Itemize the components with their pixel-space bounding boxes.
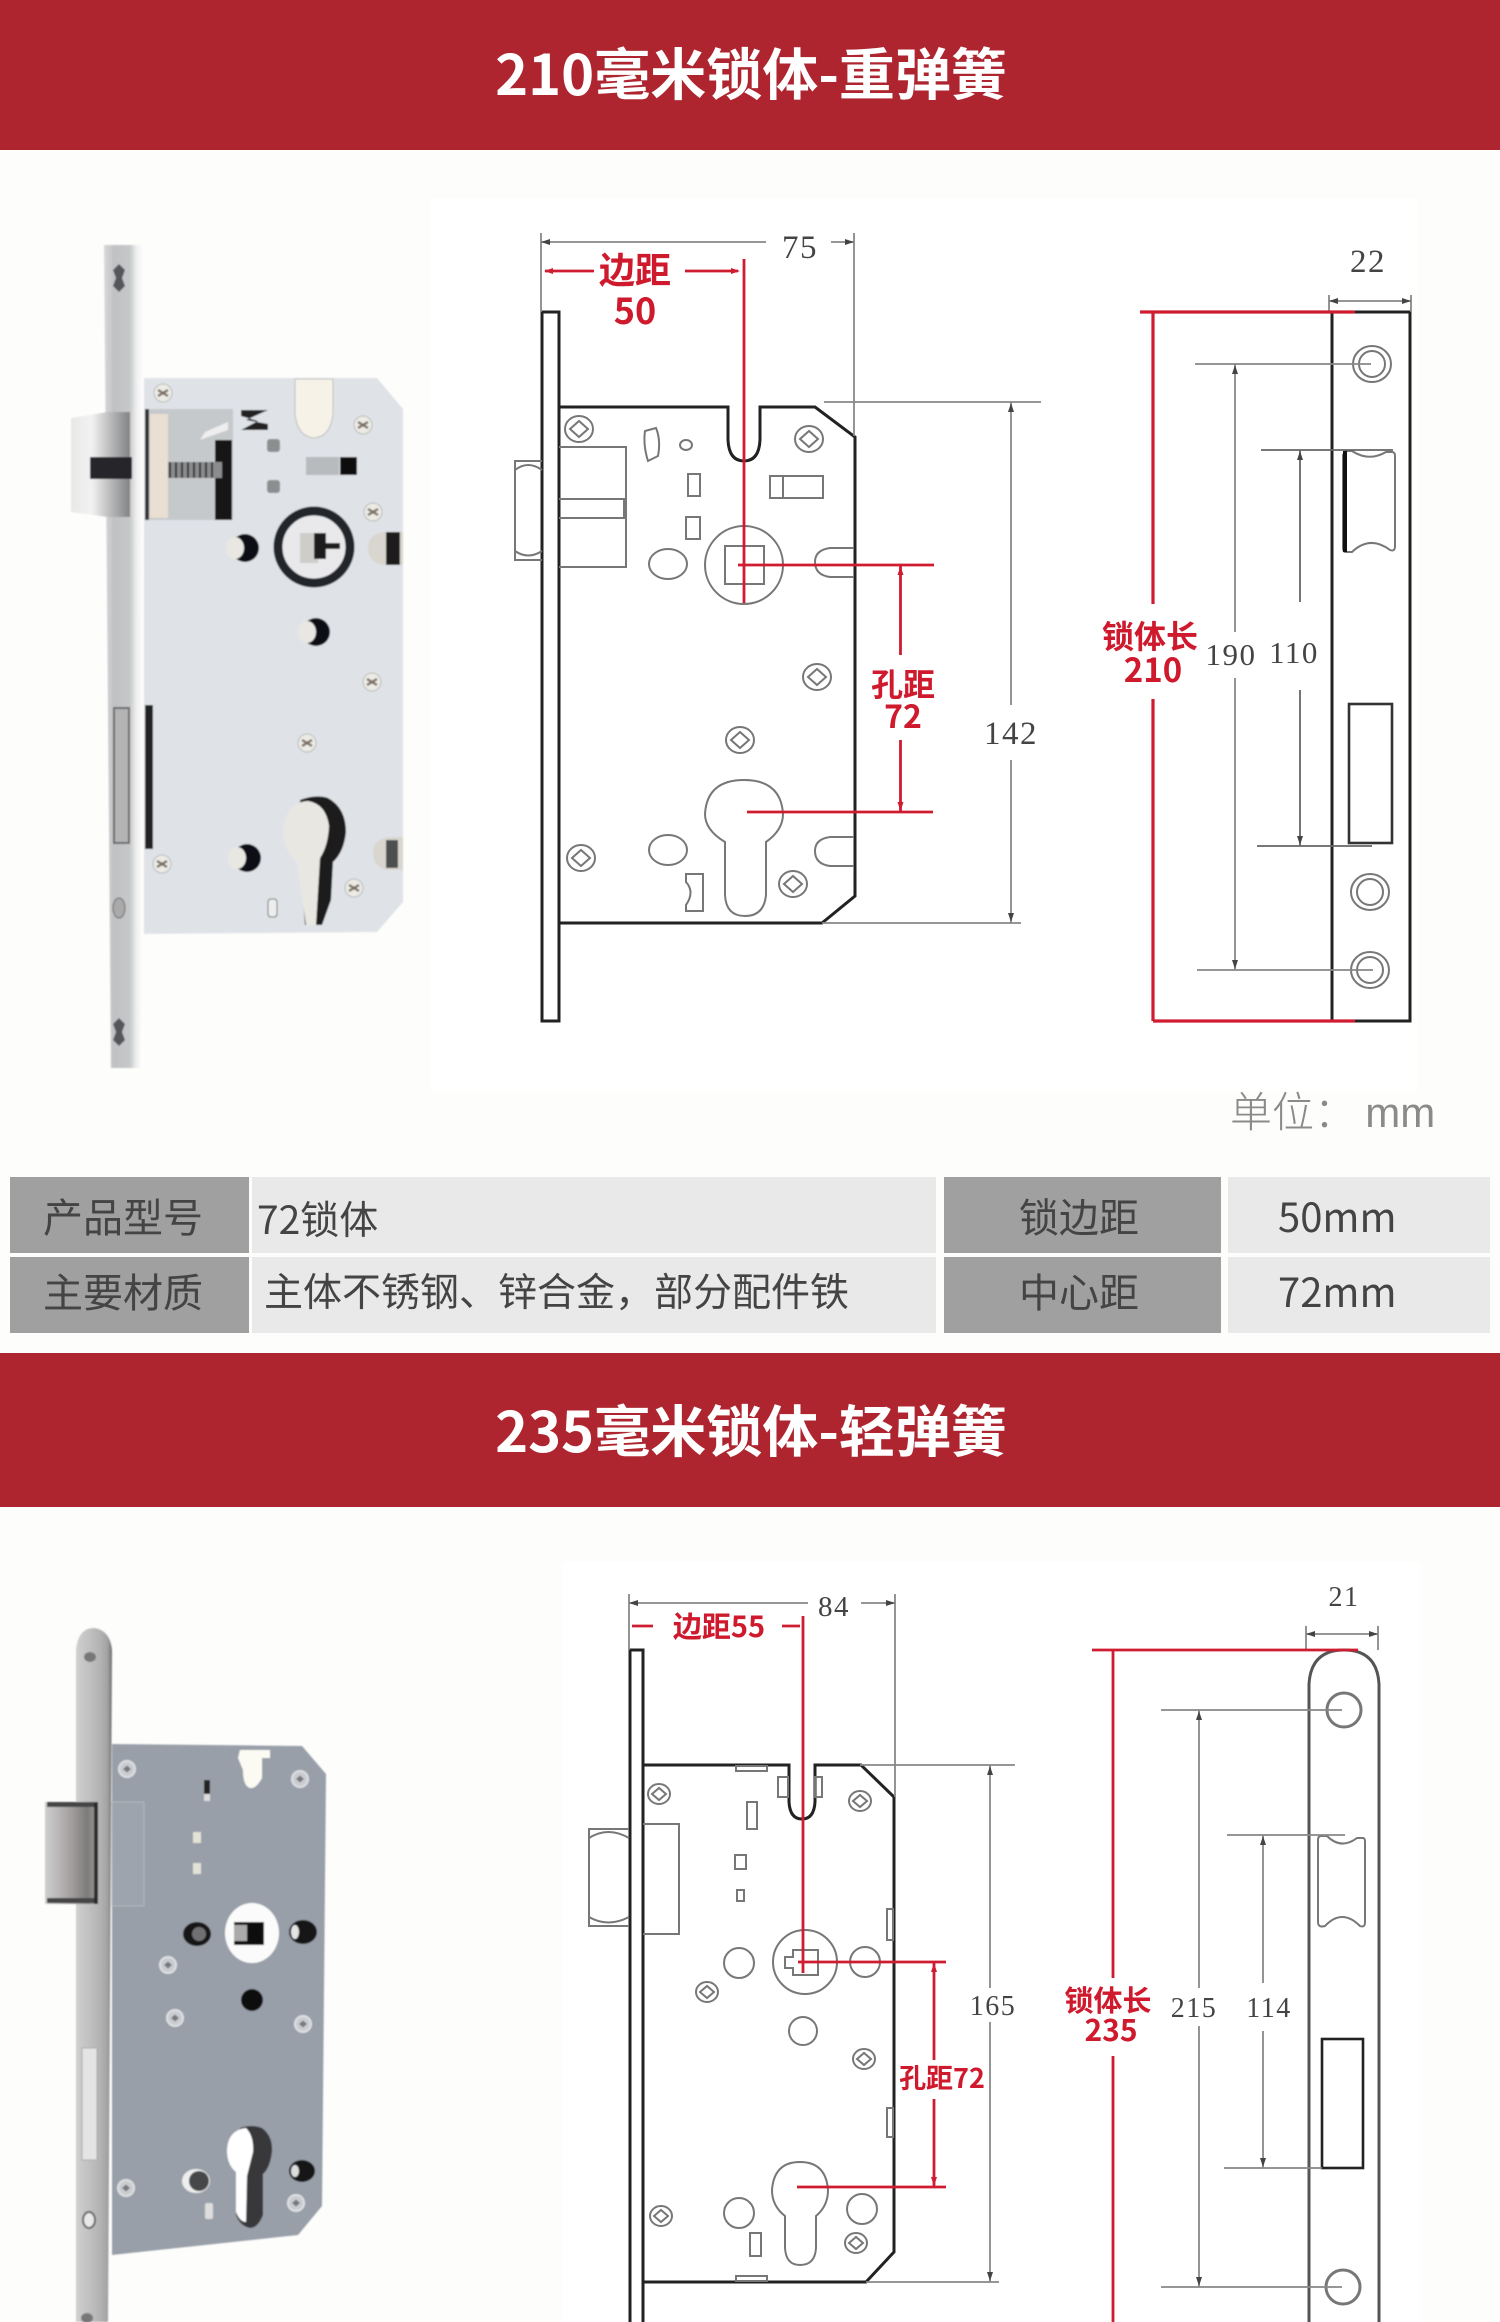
spindle hole <box>705 526 783 604</box>
callout: body length 210 <box>1102 312 1355 1021</box>
cylinder hole <box>705 780 783 916</box>
row: model: 72锁体 <box>257 1190 378 1246</box>
unit note: 单位： mm <box>1230 1079 1435 1140</box>
dimension: 110 <box>1257 450 1393 846</box>
panel: 210 technical drawing <box>431 198 1417 1091</box>
callout: body length 210: 锁体长 <box>1102 612 1198 658</box>
row: material: 主体不锈钢、锌合金，部分配件铁 <box>264 1262 849 1318</box>
callout: hole spacing 72: 孔距72 <box>899 2057 985 2096</box>
side drawing <box>1309 1650 1379 2322</box>
callout: body length 210: 210 <box>1124 644 1182 692</box>
callout: hole spacing 72: 72 <box>884 692 922 738</box>
side drawing <box>1332 312 1410 1021</box>
row: material: 中心距 <box>1019 1261 1139 1319</box>
ovals and slots <box>649 548 854 866</box>
latch <box>589 1824 679 1934</box>
dimension: thickness 22: 22 <box>1350 244 1386 280</box>
dimension: width 84: 84 <box>818 1591 850 1623</box>
ovals <box>724 1947 880 2228</box>
heading: 210: 210毫米锁体-重弹簧 <box>495 31 1007 112</box>
latch face <box>1343 451 1395 552</box>
bolt slot <box>1322 2039 1363 2168</box>
front drawing <box>589 1650 894 2322</box>
faceplate <box>76 1628 112 2322</box>
callout: body length 235 <box>1064 1650 1358 2322</box>
dimension: height 142 <box>822 402 1041 923</box>
callout: backset 55: 边距55 <box>673 1604 765 1646</box>
header: 235 lock body <box>0 1353 1500 1507</box>
faint inner rectangle <box>112 1802 144 1906</box>
case screws <box>153 384 382 897</box>
screws <box>648 1784 875 2253</box>
cylinder hole <box>772 2162 828 2265</box>
spec table <box>10 1177 1490 1333</box>
dimension: thickness 22 <box>1329 244 1411 312</box>
case plate <box>112 1744 326 2255</box>
holes <box>1351 346 1391 988</box>
dark strip <box>145 705 153 849</box>
callout: backset 50: 50 <box>614 283 656 335</box>
callout: body length 235: 锁体长 <box>1064 1978 1152 2020</box>
dimension: 215: 215 <box>1171 1993 1217 2024</box>
spindle ring <box>278 511 350 583</box>
screws <box>565 416 831 897</box>
header: 210 lock body <box>0 0 1500 150</box>
cylinder cutout <box>283 796 346 925</box>
spring window <box>145 409 268 520</box>
small cutouts <box>735 1766 893 2281</box>
row: model: 50mm <box>1278 1186 1396 1244</box>
oval holes <box>182 1920 317 2193</box>
top notch <box>295 379 333 438</box>
callout: hole spacing 72 <box>738 565 935 812</box>
latch face <box>1318 1836 1365 1926</box>
latch bolt <box>71 412 132 517</box>
cylinder cutout <box>227 2126 272 2228</box>
row: material: 主要材质 <box>43 1261 203 1319</box>
faceplate <box>104 245 144 1068</box>
panel: 235 technical drawing <box>563 1562 1420 2322</box>
dimension: height 165 <box>860 1765 1016 2282</box>
photo: 235 mm lock body <box>45 1628 326 2322</box>
edge slots <box>368 532 403 870</box>
spindle opening <box>225 1903 279 1963</box>
holes <box>1326 1693 1361 2304</box>
dimension: 215 <box>1161 1710 1342 2287</box>
small cutouts <box>644 428 823 911</box>
dimension: width 75: 75 <box>782 230 818 266</box>
dimension: thickness 21 <box>1306 1582 1378 1650</box>
dimension: 110: 110 <box>1269 635 1319 670</box>
spindle hole <box>773 1930 837 1994</box>
bolt slot <box>1349 704 1392 843</box>
row: material: 72mm <box>1278 1261 1396 1319</box>
dimension: 190 <box>1195 364 1373 970</box>
callout: backset 50: 边距 <box>599 242 671 294</box>
case screws <box>118 1761 311 2211</box>
row: material <box>10 1257 1490 1333</box>
crescent holes <box>226 534 330 872</box>
latch bolt <box>45 1802 98 1904</box>
row: model: 产品型号 <box>43 1186 203 1244</box>
small cutouts <box>267 439 357 917</box>
dimension: 114: 114 <box>1246 1993 1292 2024</box>
dimension: width 75 <box>541 230 854 436</box>
front drawing <box>515 312 855 1021</box>
dimension: height 165: 165 <box>970 1991 1016 2022</box>
dimension: thickness 21: 21 <box>1328 1582 1360 1613</box>
latch <box>515 447 626 567</box>
dimension: 190: 190 <box>1206 637 1256 672</box>
dimension: 114 <box>1224 1835 1345 2168</box>
callout: body length 235: 235 <box>1084 2006 1138 2050</box>
small cutouts <box>193 1780 213 2219</box>
dimension: height 142: 142 <box>984 716 1038 752</box>
dimension: width 84 <box>629 1591 895 1797</box>
row: model <box>10 1177 1490 1253</box>
top notch <box>238 1750 270 1788</box>
callout: backset 50 <box>544 242 744 603</box>
callout: backset 55 <box>632 1604 803 1973</box>
heading: 235: 235毫米锁体-轻弹簧 <box>495 1388 1007 1469</box>
case plate <box>144 378 403 934</box>
callout: hole spacing 72: 孔距 <box>871 660 935 706</box>
callout: hole spacing 72 <box>797 1962 985 2187</box>
photo: 210 mm lock body <box>71 245 403 1068</box>
row: model: 锁边距 <box>1019 1186 1139 1244</box>
